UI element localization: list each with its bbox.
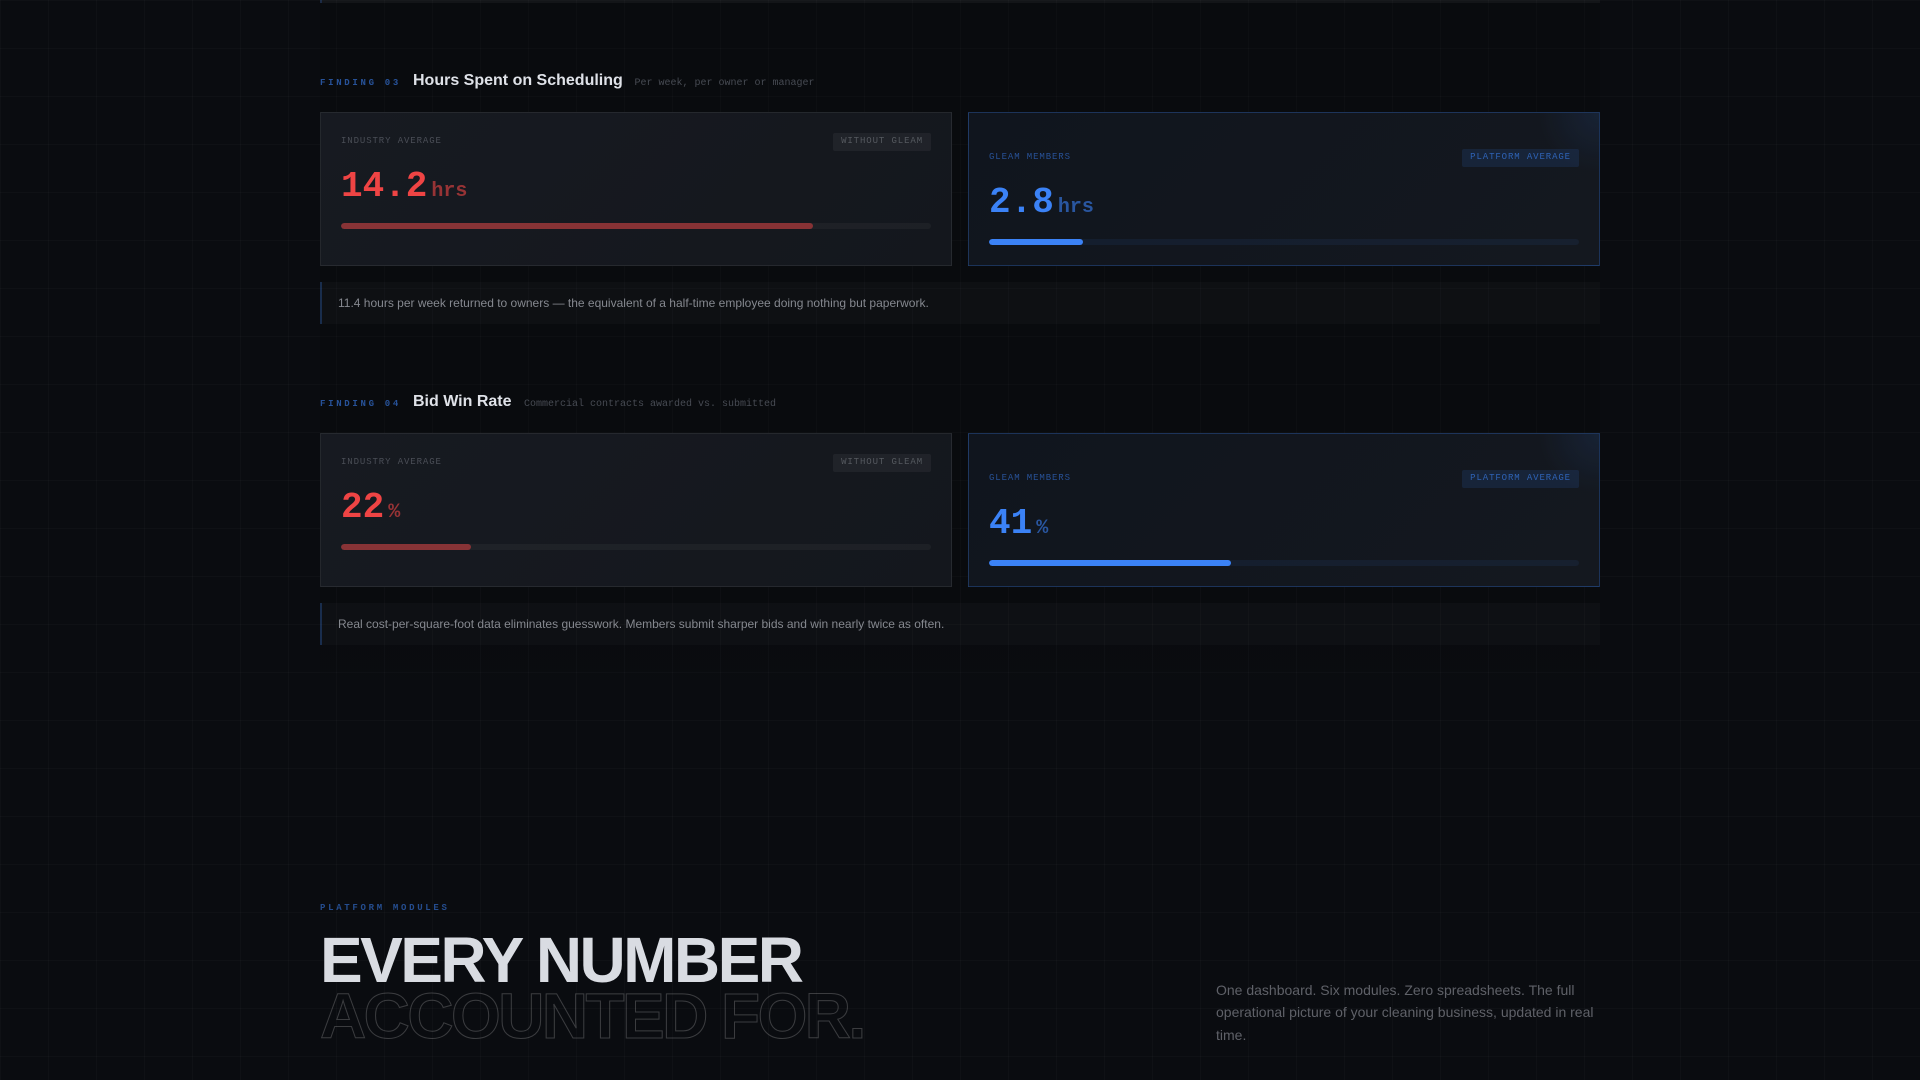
- panel: hours, industry average: [320, 112, 952, 266]
- value 2.8 hrs: 2.8: [989, 182, 1054, 223]
- badge: [1462, 149, 1579, 167]
- previous finding note strip: [320, 0, 1600, 3]
- progress bar 41%: [989, 560, 1579, 566]
- badge: WITHOUT GLEAM: [841, 457, 923, 467]
- badge: PLATFORM AVERAGE: [1470, 152, 1571, 162]
- progress bar 80%: [341, 223, 931, 229]
- value 41 %: %: [1036, 517, 1048, 540]
- progress bar 16%: [989, 239, 1579, 245]
- panel: hours, gleam members: [968, 112, 1600, 266]
- badge: [833, 133, 931, 151]
- finding 04 heading: [320, 393, 776, 410]
- section headline: EVERY NUMBER: [320, 924, 801, 996]
- finding 03 heading: [320, 72, 815, 89]
- finding 04 subtitle: Commercial contracts awarded vs. submitted: [524, 399, 776, 410]
- badge: PLATFORM AVERAGE: [1470, 473, 1571, 483]
- label: INDUSTRY AVERAGE: [341, 457, 442, 467]
- callout: hours: [320, 282, 1600, 324]
- label: GLEAM MEMBERS: [989, 473, 1071, 483]
- finding 03 title: Hours Spent on Scheduling: [413, 72, 623, 89]
- finding 03 tag: FINDING 03: [320, 78, 401, 88]
- callout: bids: Real cost-per-square-foot data eliminates guesswork. Members submit sharper bids and win nearly twice as often.: [338, 617, 944, 631]
- panel: bids, gleam members: [968, 433, 1600, 587]
- value 14.2 hrs: [341, 166, 467, 207]
- value 22 %: %: [388, 501, 400, 524]
- finding 04 title: Bid Win Rate: [413, 393, 512, 410]
- badge: WITHOUT GLEAM: [841, 136, 923, 146]
- panel: bids, industry average: [320, 433, 952, 587]
- value 14.2 hrs: hrs: [431, 180, 467, 203]
- value 41 %: 41: [989, 503, 1032, 544]
- value 14.2 hrs: 14.2: [341, 166, 427, 207]
- label: INDUSTRY AVERAGE: [341, 136, 442, 146]
- callout: bids: [320, 603, 1600, 645]
- value 22 %: 22: [341, 487, 384, 528]
- section eyebrow: PLATFORM MODULES: [320, 903, 450, 913]
- progress bar 22%: [341, 544, 931, 550]
- badge: [1462, 470, 1579, 488]
- badge: [833, 454, 931, 472]
- section headline: [320, 924, 862, 1039]
- callout: hours: 11.4 hours per week returned to owners — the equivalent of a half-time employee doing nothing but paperwork.: [338, 296, 929, 310]
- section description: One dashboard. Six modules. Zero spreadsheets. The full operational picture of your cleaning business, updated in real time.: [1216, 982, 1593, 1043]
- value 2.8 hrs: [989, 182, 1094, 223]
- label: GLEAM MEMBERS: [989, 152, 1071, 162]
- finding 04 tag: FINDING 04: [320, 399, 401, 409]
- value 2.8 hrs: hrs: [1058, 196, 1094, 219]
- finding 03 subtitle: Per week, per owner or manager: [634, 78, 815, 89]
